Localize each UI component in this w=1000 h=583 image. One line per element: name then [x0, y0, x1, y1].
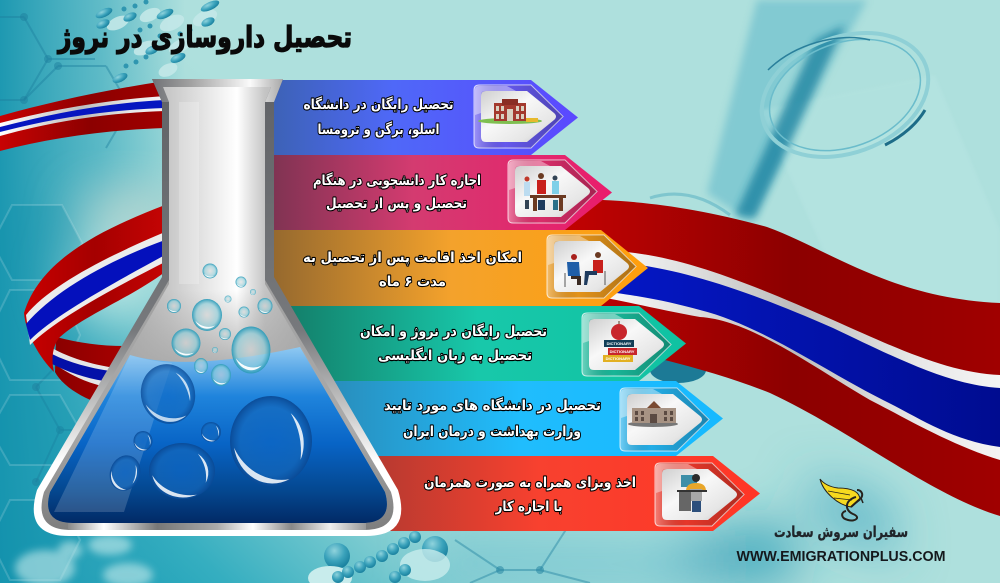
- text: band 4: تحصیل به زبان انگلیسی: [378, 347, 532, 364]
- flask base strip: [68, 523, 366, 530]
- band 2: student work permit: [270, 155, 612, 230]
- website: WWW.EMIGRATIONPLUS.COM: [736, 549, 946, 565]
- icon: winged S: [820, 479, 863, 520]
- background: test tubes: [650, 0, 1000, 383]
- title: تحصیل داروسازی در نروژ: [56, 20, 352, 54]
- text: band 5: وزارت بهداشت و درمان ایران: [403, 424, 581, 440]
- icon: two people talking: [547, 235, 636, 298]
- text: band 6: اخذ ویزای همراه به صورت همزمان: [424, 475, 636, 491]
- text: band 1: اسلو، برگن و ترومسا: [318, 121, 440, 138]
- text: band 5: [384, 397, 601, 440]
- icon: apple and dictionaries: DICTIONARY: [607, 341, 632, 346]
- list of study benefits: [270, 80, 760, 531]
- flask: [34, 79, 401, 536]
- text: band 6: [424, 475, 636, 515]
- flask neck: [163, 87, 271, 285]
- text: band 1: تحصیل رایگان در دانشگاه: [304, 96, 454, 113]
- flask neck highlight: [179, 102, 199, 287]
- text: band 2: اجازه کار دانشجویی در هنگام: [313, 172, 481, 189]
- icon: person at desk: [655, 463, 744, 526]
- text: band 3: مدت ۶ ماه: [379, 274, 446, 290]
- text: band 2: تحصیل و پس از تحصیل: [326, 196, 467, 212]
- icon: ministry building: [620, 388, 709, 451]
- text: band 6: با اجازه کار: [495, 499, 562, 515]
- flask cone shading: [48, 284, 387, 523]
- background: molecule beads bottom: [15, 531, 450, 583]
- flask inner cone: [48, 284, 387, 523]
- text: band 4: تحصیل رایگان در نروژ و امکان: [360, 323, 547, 340]
- flask liquid: [48, 347, 387, 523]
- ribbon: top left: [0, 81, 165, 151]
- band 5: approved universities: [270, 381, 723, 456]
- text: band 4: [360, 323, 547, 364]
- logo: Safiran Soroush Saadat: [736, 479, 946, 565]
- icon: university building: [474, 85, 563, 148]
- icon: apple and dictionaries: [582, 313, 671, 376]
- band 4: English-taught study: [270, 306, 686, 381]
- ribbon: front loop: [24, 205, 165, 372]
- band 6: companion visa: [270, 456, 760, 531]
- icon: students at table: [508, 160, 597, 223]
- text: band 3: [303, 250, 522, 290]
- text: band 5: تحصیل در دانشگاه های مورد تایید: [384, 397, 601, 414]
- text: band 3: امکان اخذ اقامت پس از تحصیل به: [303, 250, 522, 266]
- band 3: residence permit: [270, 230, 648, 306]
- flask rim: [152, 79, 283, 102]
- background: molecule beads top: [94, 0, 221, 85]
- bubbles rising: [167, 264, 272, 386]
- liquid highlight: [54, 355, 172, 512]
- ribbon: Norwegian flag, right sweep: [540, 199, 1000, 516]
- ribbon: back loop: [52, 337, 125, 402]
- text: band 1: [304, 96, 454, 138]
- flask outer glass: [34, 79, 401, 536]
- icon: apple and dictionaries: DICTIONARY: [606, 356, 631, 361]
- background: molecular hex network: [0, 13, 590, 583]
- text: band 2: [313, 172, 481, 212]
- logo name: سفیران سروش سعادت: [774, 523, 908, 541]
- band 1: free tuition: [270, 80, 578, 155]
- flask middle glass: [42, 280, 393, 530]
- icon: apple and dictionaries: DICTIONARY: [610, 349, 635, 354]
- bubbles in liquid: [105, 358, 312, 499]
